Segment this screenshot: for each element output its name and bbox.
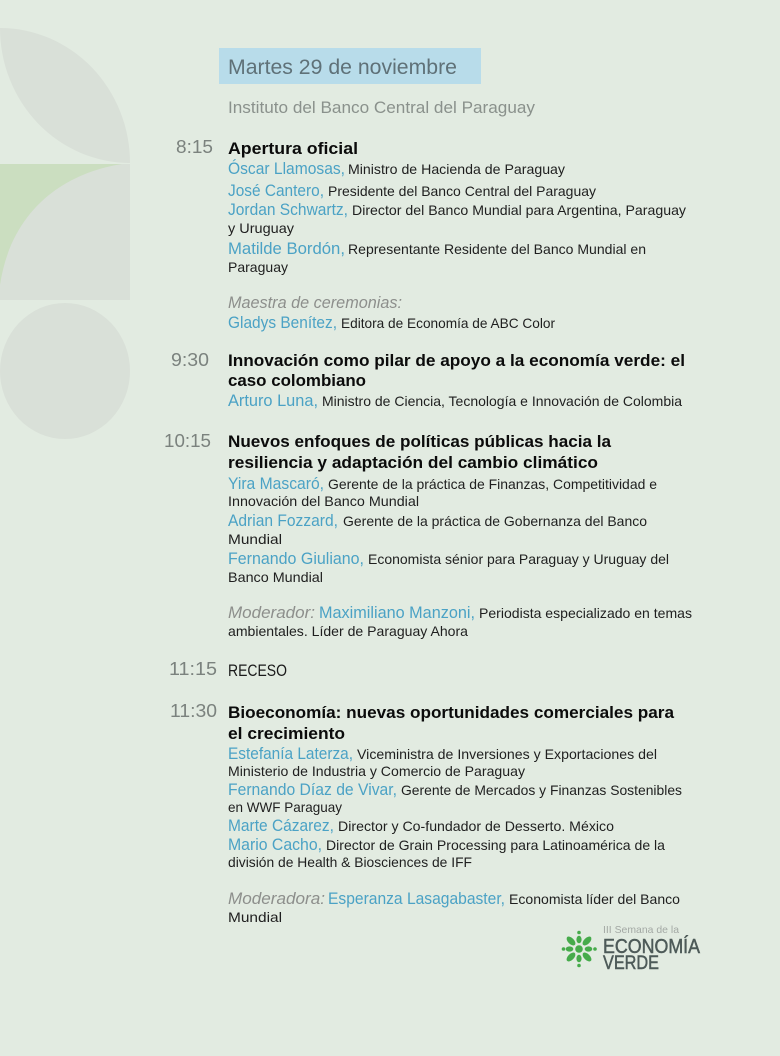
session: bioeconomía: en WWF Paraguay bbox=[228, 799, 342, 815]
session: bioeconomía: Moderadora: bbox=[228, 890, 325, 908]
session: bioeconomía: Director y Co-fundador de Desserto. México bbox=[338, 818, 614, 834]
session: bioeconomía: Economista líder del Banco bbox=[509, 891, 680, 907]
session: apertura oficial bbox=[176, 137, 686, 332]
session: apertura oficial: Director del Banco Mundial para Argentina, Paraguay bbox=[352, 202, 686, 218]
session: innovación: Innovación como pilar de apoyo a la economía verde: el bbox=[228, 351, 685, 370]
session: bioeconomía: Estefanía Laterza, bbox=[228, 745, 353, 763]
session: innovación: Ministro de Ciencia, Tecnología e Innovación de Colombia bbox=[322, 393, 682, 409]
session: apertura oficial: Matilde Bordón, bbox=[228, 240, 345, 258]
session: apertura oficial: Óscar Llamosas, bbox=[228, 159, 345, 178]
session: innovación bbox=[171, 350, 685, 410]
session: nuevos enfoques: Maximiliano Manzoni, bbox=[319, 604, 475, 622]
venue: Instituto del Banco Central del Paraguay bbox=[228, 98, 535, 117]
session: nuevos enfoques: Gerente de la práctica de Finanzas, Competitividad e bbox=[328, 476, 657, 492]
logo: III Semana de la Economía Verde: III Semana de la bbox=[603, 924, 679, 936]
session: nuevos enfoques: resiliencia y adaptación del cambio climático bbox=[228, 453, 598, 472]
session: nuevos enfoques: Yira Mascaró, bbox=[228, 475, 324, 493]
session: nuevos enfoques: Mundial bbox=[228, 531, 282, 547]
session: apertura oficial: Paraguay bbox=[228, 259, 288, 275]
session: nuevos enfoques: Gerente de la práctica de Gobernanza del Banco bbox=[343, 513, 647, 529]
logo: III Semana de la Economía Verde bbox=[562, 924, 700, 974]
session: apertura oficial: José Cantero, bbox=[228, 182, 324, 200]
icon: green flower bbox=[562, 931, 597, 967]
session: nuevos enfoques: Periodista especializado en temas bbox=[479, 605, 692, 621]
session: bioeconomía: Bioeconomía: nuevas oportunidades comerciales para bbox=[228, 703, 675, 722]
session: receso bbox=[169, 659, 287, 680]
session: bioeconomía: Esperanza Lasagabaster, bbox=[328, 890, 505, 908]
session: nuevos enfoques: Nuevos enfoques de políticas públicas hacia la bbox=[228, 432, 612, 451]
session: nuevos enfoques: ambientales. Líder de Paraguay Ahora bbox=[228, 623, 468, 639]
session: apertura oficial: Editora de Economía de ABC Color bbox=[341, 315, 555, 331]
session: receso: RECESO bbox=[228, 662, 287, 680]
session: nuevos enfoques: Moderador: bbox=[228, 604, 315, 622]
decorative geometric shapes bbox=[0, 28, 130, 439]
session: bioeconomía: Viceministra de Inversiones y Exportaciones del bbox=[357, 746, 657, 762]
session: apertura oficial: Apertura oficial bbox=[228, 139, 358, 158]
session: bioeconomía: Gerente de Mercados y Finanzas Sostenibles bbox=[401, 782, 682, 798]
session: apertura oficial: Presidente del Banco Central del Paraguay bbox=[328, 183, 596, 199]
session: bioeconomía: Director de Grain Processing para Latinoamérica de la bbox=[326, 837, 665, 853]
session: innovación: caso colombiano bbox=[228, 371, 366, 390]
session: apertura oficial: Gladys Benítez, bbox=[228, 314, 337, 332]
logo: III Semana de la Economía Verde: ECONOMÍA bbox=[603, 935, 700, 958]
logo: III Semana de la Economía Verde: VERDE bbox=[603, 953, 659, 974]
session: nuevos enfoques: Innovación del Banco Mundial bbox=[228, 493, 419, 509]
session: nuevos enfoques: Fernando Giuliano, bbox=[228, 550, 364, 568]
session: apertura oficial: Ministro de Hacienda de Paraguay bbox=[348, 161, 565, 177]
date heading: Martes 29 de noviembre bbox=[228, 55, 457, 79]
date heading bbox=[219, 48, 481, 84]
session: nuevos enfoques: 10:15 bbox=[164, 431, 211, 451]
session: receso: 11:15 bbox=[169, 659, 217, 679]
session: innovación: Arturo Luna, bbox=[228, 392, 318, 410]
session: nuevos enfoques: Economista sénior para Paraguay y Uruguay del bbox=[368, 551, 669, 567]
session: apertura oficial: Maestra de ceremonias: bbox=[228, 294, 402, 312]
session: apertura oficial: Representante Residente del Banco Mundial en bbox=[348, 241, 646, 257]
session: bioeconomía: 11:30 bbox=[170, 701, 217, 721]
session: bioeconomía: Marte Cázarez, bbox=[228, 817, 334, 835]
session: nuevos enfoques: Banco Mundial bbox=[228, 569, 323, 585]
session: bioeconomía: Fernando Díaz de Vivar, bbox=[228, 781, 397, 799]
session: bioeconomía: el crecimiento bbox=[228, 724, 345, 743]
session: bioeconomía: Ministerio de Industria y Comercio de Paraguay bbox=[228, 763, 525, 779]
session: bioeconomía: Mundial bbox=[228, 909, 282, 925]
session: apertura oficial: Jordan Schwartz, bbox=[228, 201, 348, 219]
session: bioeconomía: Mario Cacho, bbox=[228, 836, 322, 854]
session: bioeconomía: división de Health & Biosciences de IFF bbox=[228, 854, 472, 870]
session: bioeconomía bbox=[170, 701, 682, 925]
session: apertura oficial: y Uruguay bbox=[228, 220, 294, 236]
session: nuevos enfoques bbox=[164, 431, 692, 639]
session: apertura oficial: 8:15 bbox=[176, 137, 213, 157]
session: nuevos enfoques: Adrian Fozzard, bbox=[228, 512, 338, 530]
session: innovación: 9:30 bbox=[171, 350, 209, 370]
